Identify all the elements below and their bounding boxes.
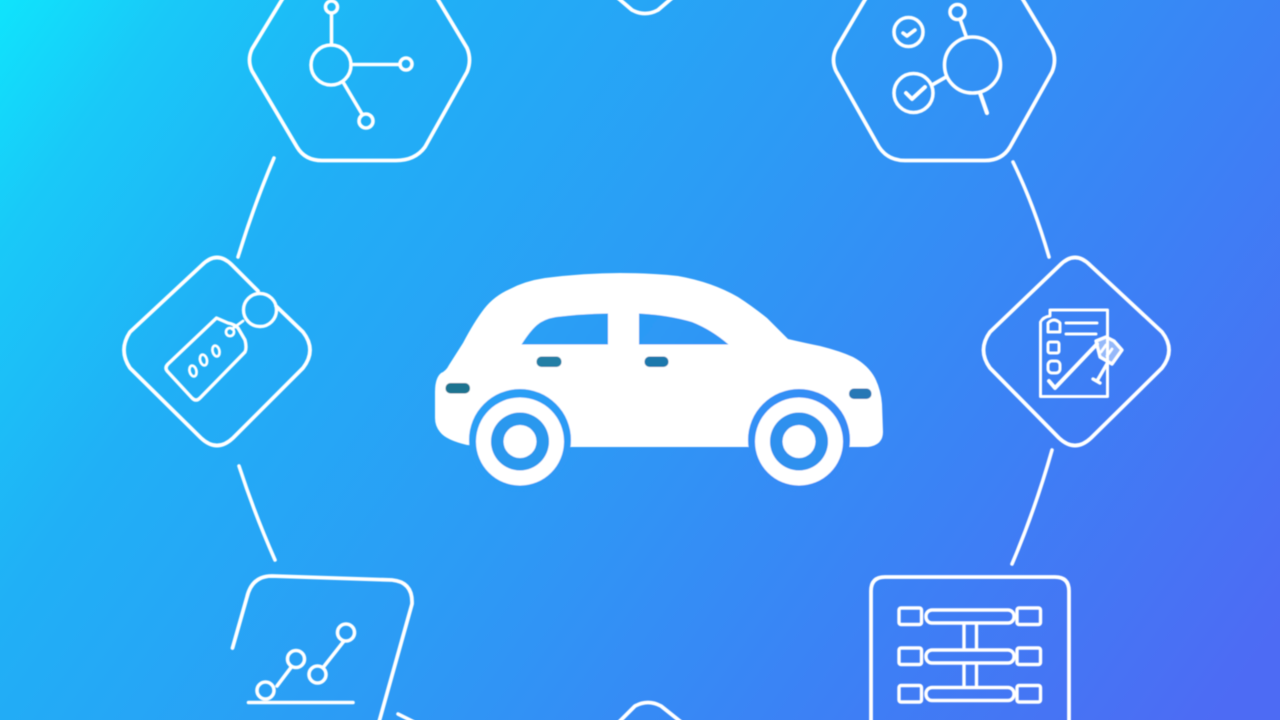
rounded outline <box>232 576 412 720</box>
front wheel arch <box>748 389 850 491</box>
diamond outline <box>124 258 310 446</box>
icon: hub with three nodes <box>311 1 412 128</box>
rear wheel arch <box>469 389 571 491</box>
car body <box>435 273 883 447</box>
rear window <box>522 314 608 344</box>
panel: network nodes hexagon <box>250 0 470 160</box>
panel: document and key diamond <box>984 258 1169 446</box>
panel: top center hexagon (cropped) <box>618 0 672 14</box>
rear door handle <box>536 356 562 367</box>
icon: central car <box>435 273 883 491</box>
panel: layout grid rectangle <box>871 577 1069 720</box>
panel: price tag diamond <box>124 258 310 446</box>
icon: rows and connectors <box>899 608 1040 702</box>
front window <box>639 314 728 344</box>
hexagon outline <box>834 0 1054 160</box>
head light <box>849 388 872 399</box>
panel: search and checks hexagon <box>834 0 1054 160</box>
icon: hanging tag <box>166 294 276 400</box>
icon: magnifier with check circles <box>894 4 1000 113</box>
tail light <box>446 383 470 394</box>
hexagon outline <box>250 0 470 160</box>
rear wheel <box>476 398 564 486</box>
icon: line chart <box>248 624 354 702</box>
panel: growth chart shape <box>232 576 412 720</box>
rectangle outline <box>871 577 1069 720</box>
front door handle <box>644 356 668 367</box>
connector lines between icons <box>238 158 1052 720</box>
diamond outline <box>984 258 1169 446</box>
icon: checklist with key <box>1040 310 1122 396</box>
panel: bottom center hexagon (cropped) <box>619 702 681 720</box>
front wheel <box>755 398 843 486</box>
